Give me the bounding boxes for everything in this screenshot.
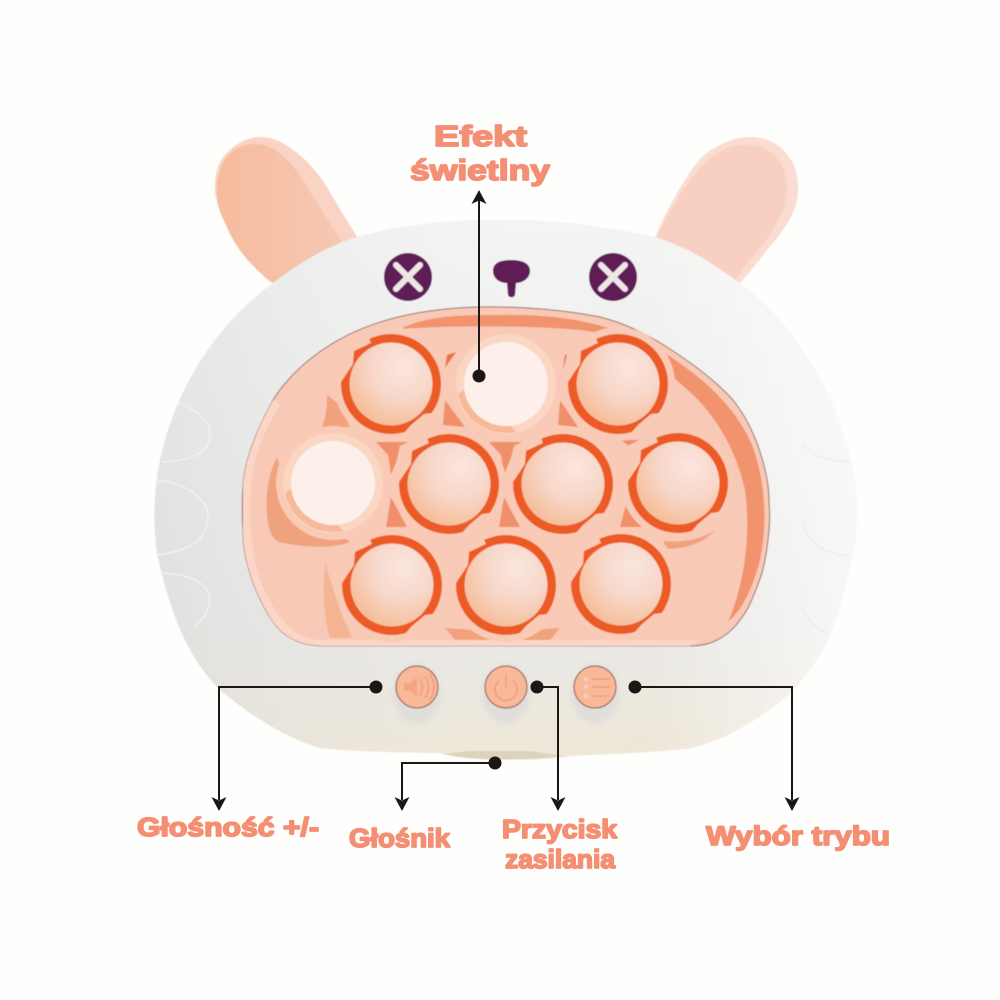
pop button row 1, left [334,327,448,441]
label: power button: zasilania [505,844,616,874]
side grips right [803,443,850,633]
left eye [384,253,432,301]
volume button [393,664,441,724]
pop button row 2, second [392,427,506,541]
body side shading [154,220,857,760]
infographic canvas [137,124,889,870]
callout arrow: power [530,680,566,811]
pop button row 2, lit [276,426,390,540]
pop button row 1, lit [449,327,563,441]
callout arrow: speaker [394,756,502,811]
pop button row 2, fourth [621,426,735,540]
mode button [571,664,619,724]
panel rim highlight [243,400,700,646]
label: power button [502,814,618,874]
gaps between buttons [376,352,660,640]
top and right shadow band [400,315,764,622]
pop button row 3, right [564,527,678,641]
label: volume: Głośność +/- [137,812,319,842]
callout arrow: volume [212,680,382,811]
label: light effect: świetlny [410,155,550,187]
pop button row 1, right [561,327,675,441]
callout arrow: mode [628,680,800,811]
label: mode selection: Wybór trybu [706,821,890,851]
toy: pink bunny pop-it console [154,137,857,760]
label: power button: Przycisk [502,814,618,844]
speaker bump [443,751,565,760]
shadow patches between buttons [266,395,715,638]
nose [493,260,530,297]
pop button row 2, third [506,427,620,541]
right ear [655,137,798,283]
label: light effect [410,121,550,187]
body shell [154,220,857,760]
left ear [215,137,357,283]
right eye [589,253,637,301]
side grips left [157,403,210,627]
label: light effect: Efekt [434,121,527,153]
callout arrow: light effect [472,190,486,382]
pink button panel [242,307,770,646]
pop button row 3, middle [449,528,563,642]
pop button row 3, left [335,528,449,642]
label: speaker: Głośnik [349,823,451,853]
power button [482,664,530,724]
